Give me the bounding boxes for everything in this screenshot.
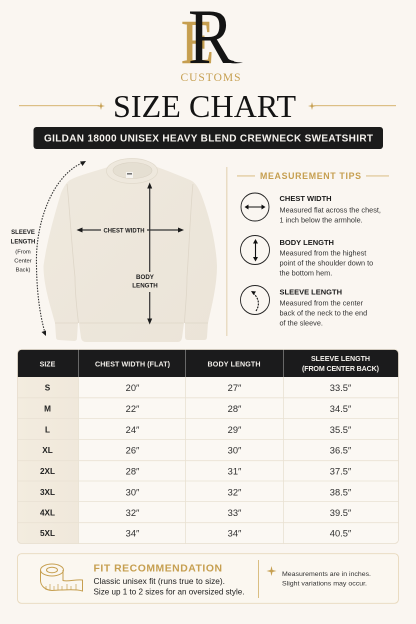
table chest width column: 32″ — [126, 508, 140, 518]
measurement note — [282, 571, 371, 588]
title — [19, 88, 396, 124]
table sleeve length column: 40.5″ — [330, 528, 352, 538]
table chest width column: 26″ — [126, 446, 140, 456]
sweatshirt illustration — [44, 158, 217, 342]
table chest width column — [126, 383, 140, 538]
table sleeve length column: 34.5″ — [330, 404, 352, 414]
table sleeve length column: 33.5″ — [330, 383, 352, 393]
table size column — [40, 384, 55, 538]
tip: sleeve length — [240, 286, 367, 328]
table body length column: 30″ — [228, 446, 242, 456]
body length arrow: LENGTH — [132, 282, 158, 290]
tips heading: MEASUREMENT TIPS — [260, 171, 361, 181]
sleeve length dotted arrow — [36, 161, 86, 336]
table chest width column: 28″ — [126, 466, 140, 476]
table header: SLEEVE LENGTH — [311, 355, 370, 363]
title: SIZE CHART — [113, 88, 296, 124]
table chest width column: 22″ — [126, 404, 140, 414]
table size column: S — [45, 384, 51, 392]
table body length column: 29″ — [228, 425, 242, 435]
measurement note: Measurements are in inches. — [282, 571, 371, 578]
table header: SIZE — [40, 360, 56, 368]
table body length column — [228, 383, 242, 538]
table header: (FROM CENTER BACK) — [302, 365, 380, 373]
sleeve length label: SLEEVE — [11, 230, 35, 236]
table body length column: 27″ — [228, 383, 242, 393]
tip: chest width: 1 inch below the armhole. — [280, 216, 363, 224]
icon: measuring tape — [40, 564, 82, 591]
table size column: L — [45, 426, 50, 434]
tip: sleeve length: SLEEVE LENGTH — [280, 288, 342, 297]
table body length column: 33″ — [228, 508, 242, 518]
sleeve length label: LENGTH — [11, 240, 35, 246]
table body length column: 34″ — [228, 528, 242, 538]
table sleeve length column: 36.5″ — [330, 446, 352, 456]
sleeve length label: Back) — [16, 268, 30, 274]
sleeve length label — [11, 230, 35, 274]
tip: chest width: CHEST WIDTH — [280, 194, 332, 203]
fit heading: FIT RECOMMENDATION — [94, 564, 222, 574]
table sleeve length column: 39.5″ — [330, 508, 352, 518]
logo wordmark: CUSTOMS — [180, 72, 240, 84]
fit description: Size up 1 to 2 sizes for an oversized style. — [94, 587, 244, 597]
tip: body length: point of the shoulder down to — [280, 258, 373, 268]
tip: sleeve length: back of the neck to the end — [280, 308, 367, 318]
measurement note: Slight variations may occur. — [282, 581, 367, 588]
tip: body length: BODY LENGTH — [280, 238, 334, 247]
table size column: XL — [42, 446, 53, 455]
table size column: M — [44, 404, 51, 414]
panel: measurement tips — [226, 167, 389, 336]
table sleeve length column: 35.5″ — [330, 425, 352, 435]
table chest width column: 20″ — [126, 383, 140, 393]
table body length column: 32″ — [228, 488, 242, 498]
product name banner: GILDAN 18000 UNISEX HEAVY BLEND CREWNECK SWEATSHIRT — [44, 134, 373, 144]
logo letter E: E — [181, 9, 214, 77]
logo — [180, 0, 243, 84]
table body length column: 28″ — [228, 404, 242, 414]
table size column: 2XL — [40, 467, 55, 476]
sleeve length label: Center — [14, 258, 32, 264]
chest width arrow — [76, 228, 184, 234]
tip: body length: Measured from the highest — [280, 248, 366, 258]
table chest width column: 24″ — [126, 425, 140, 435]
panel: fit recommendation — [18, 554, 398, 603]
body length arrow — [132, 182, 158, 324]
tip: sleeve length: Measured from the center — [280, 298, 364, 308]
chest width arrow: CHEST WIDTH — [104, 228, 145, 234]
table header: BODY LENGTH — [208, 360, 260, 368]
sweatshirt diagram — [11, 158, 217, 342]
icon: sparkle — [266, 566, 276, 576]
table size column: 3XL — [40, 488, 55, 497]
table header: CHEST WIDTH (FLAT) — [95, 360, 171, 368]
tip: sleeve length: of the sleeve. — [280, 318, 323, 328]
fit description — [94, 576, 244, 597]
table size column: 5XL — [40, 529, 55, 538]
table body length column: 31″ — [228, 466, 242, 476]
table sleeve length column: 37.5″ — [330, 466, 352, 476]
tip: chest width — [241, 193, 381, 224]
table sleeve length column — [330, 383, 352, 538]
tip: body length — [240, 236, 373, 278]
fit description: Classic unisex fit (runs true to size). — [94, 576, 225, 586]
table size column: 4XL — [40, 508, 55, 518]
table chest width column: 34″ — [126, 528, 140, 538]
table chest width column: 30″ — [126, 488, 140, 498]
table header — [40, 355, 380, 373]
tip: body length: the bottom hem. — [280, 268, 332, 278]
tip: chest width: Measured flat across the chest, — [280, 206, 381, 214]
table sleeve length column: 38.5″ — [330, 488, 352, 498]
size table — [18, 350, 398, 544]
product name banner — [34, 127, 383, 149]
body length arrow: BODY — [136, 274, 155, 281]
sleeve length label: (From — [15, 250, 31, 256]
